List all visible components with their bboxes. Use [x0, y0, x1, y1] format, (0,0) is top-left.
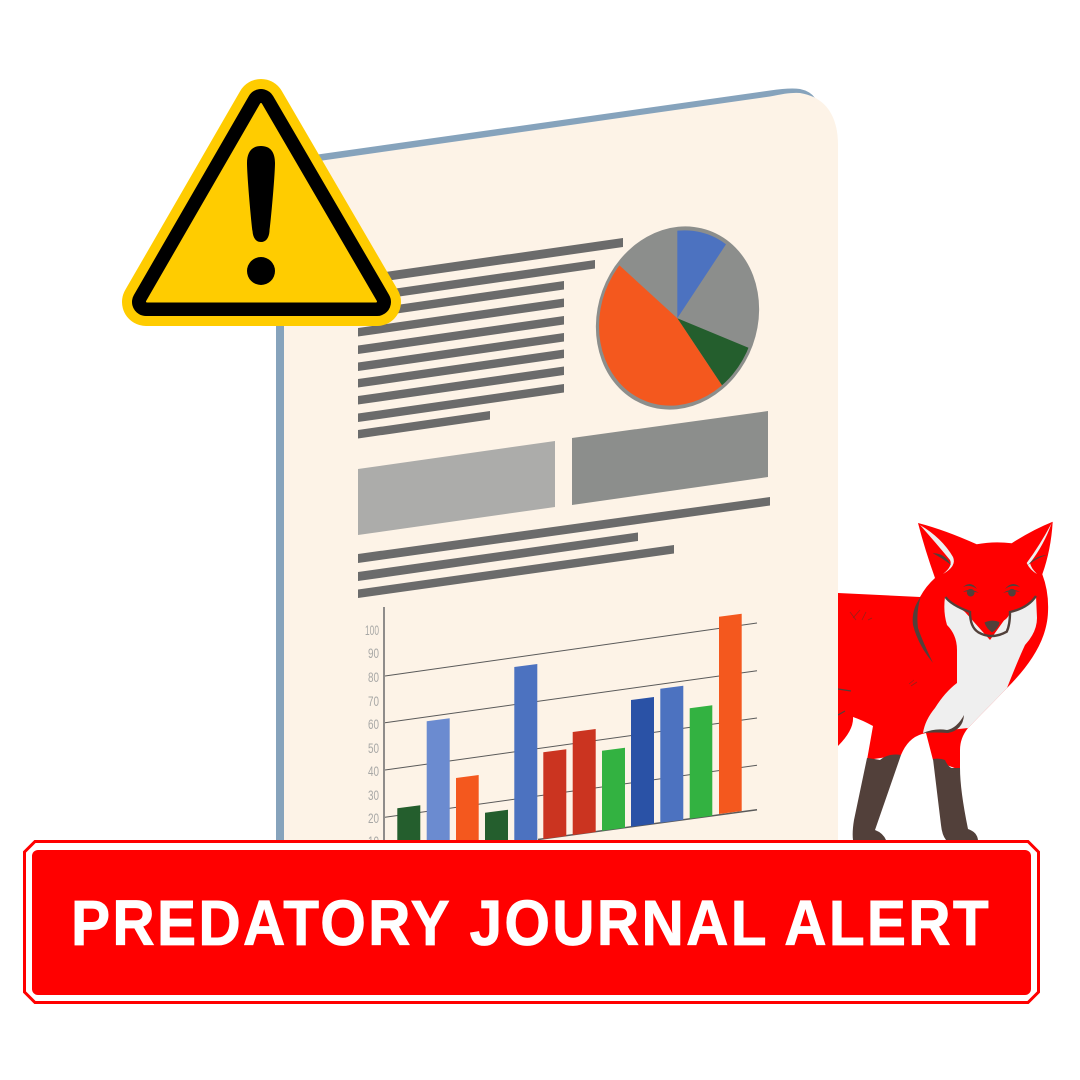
axis labels: 50 [368, 740, 379, 756]
axis labels: 60 [368, 716, 379, 732]
fox ear details [920, 523, 1052, 574]
fox [838, 522, 1053, 840]
axis labels [365, 622, 379, 849]
triangle yellow inner [147, 104, 376, 302]
banner title: PREDATORY JOURNAL ALERT [71, 887, 991, 959]
pie rim [571, 203, 784, 433]
fox rear leg [853, 755, 901, 840]
axis labels: 100 [365, 622, 379, 638]
axis labels: 70 [368, 693, 379, 709]
vertical axis [383, 607, 385, 845]
axis labels: 80 [368, 669, 379, 685]
gray block left [358, 441, 555, 535]
banner outer frame [24, 842, 1038, 1002]
exclamation mark [247, 146, 275, 242]
text lines top [358, 238, 623, 438]
axis labels: 40 [368, 763, 379, 779]
pie chart [596, 226, 760, 410]
pie slice green [678, 318, 748, 386]
banner red fill [32, 850, 1031, 995]
fox front leg [933, 759, 978, 840]
gray block right [572, 411, 768, 505]
page background [284, 93, 838, 850]
fox muzzle [945, 580, 1036, 622]
axis labels: 90 [368, 645, 379, 661]
exclamation dot [247, 257, 275, 285]
page edge [300, 88, 815, 170]
warning triangle [146, 103, 377, 302]
fox nose [984, 621, 1000, 632]
page spine [276, 320, 284, 850]
fox fur marks [838, 610, 917, 715]
fox white chest [923, 596, 1037, 733]
axis labels: 30 [368, 787, 379, 803]
triangle yellow outer [146, 103, 377, 302]
pie slices [599, 230, 748, 406]
pie slice orange [599, 266, 722, 406]
grid lines [385, 623, 757, 817]
fox muzzle outline [946, 596, 1036, 636]
text lines middle [358, 497, 770, 598]
fox eyes [963, 584, 1020, 596]
fox neck line [913, 597, 933, 663]
banner [24, 842, 1038, 1002]
baseline [538, 810, 757, 840]
bar chart [365, 607, 757, 850]
journal page [276, 88, 838, 850]
axis labels: 10 [368, 833, 379, 849]
fox chest shadow [923, 715, 964, 733]
bars [397, 614, 742, 850]
triangle black band [146, 103, 377, 302]
pie slice blue [677, 230, 726, 318]
fox body and head [838, 522, 1053, 770]
axis labels: 20 [368, 810, 379, 826]
